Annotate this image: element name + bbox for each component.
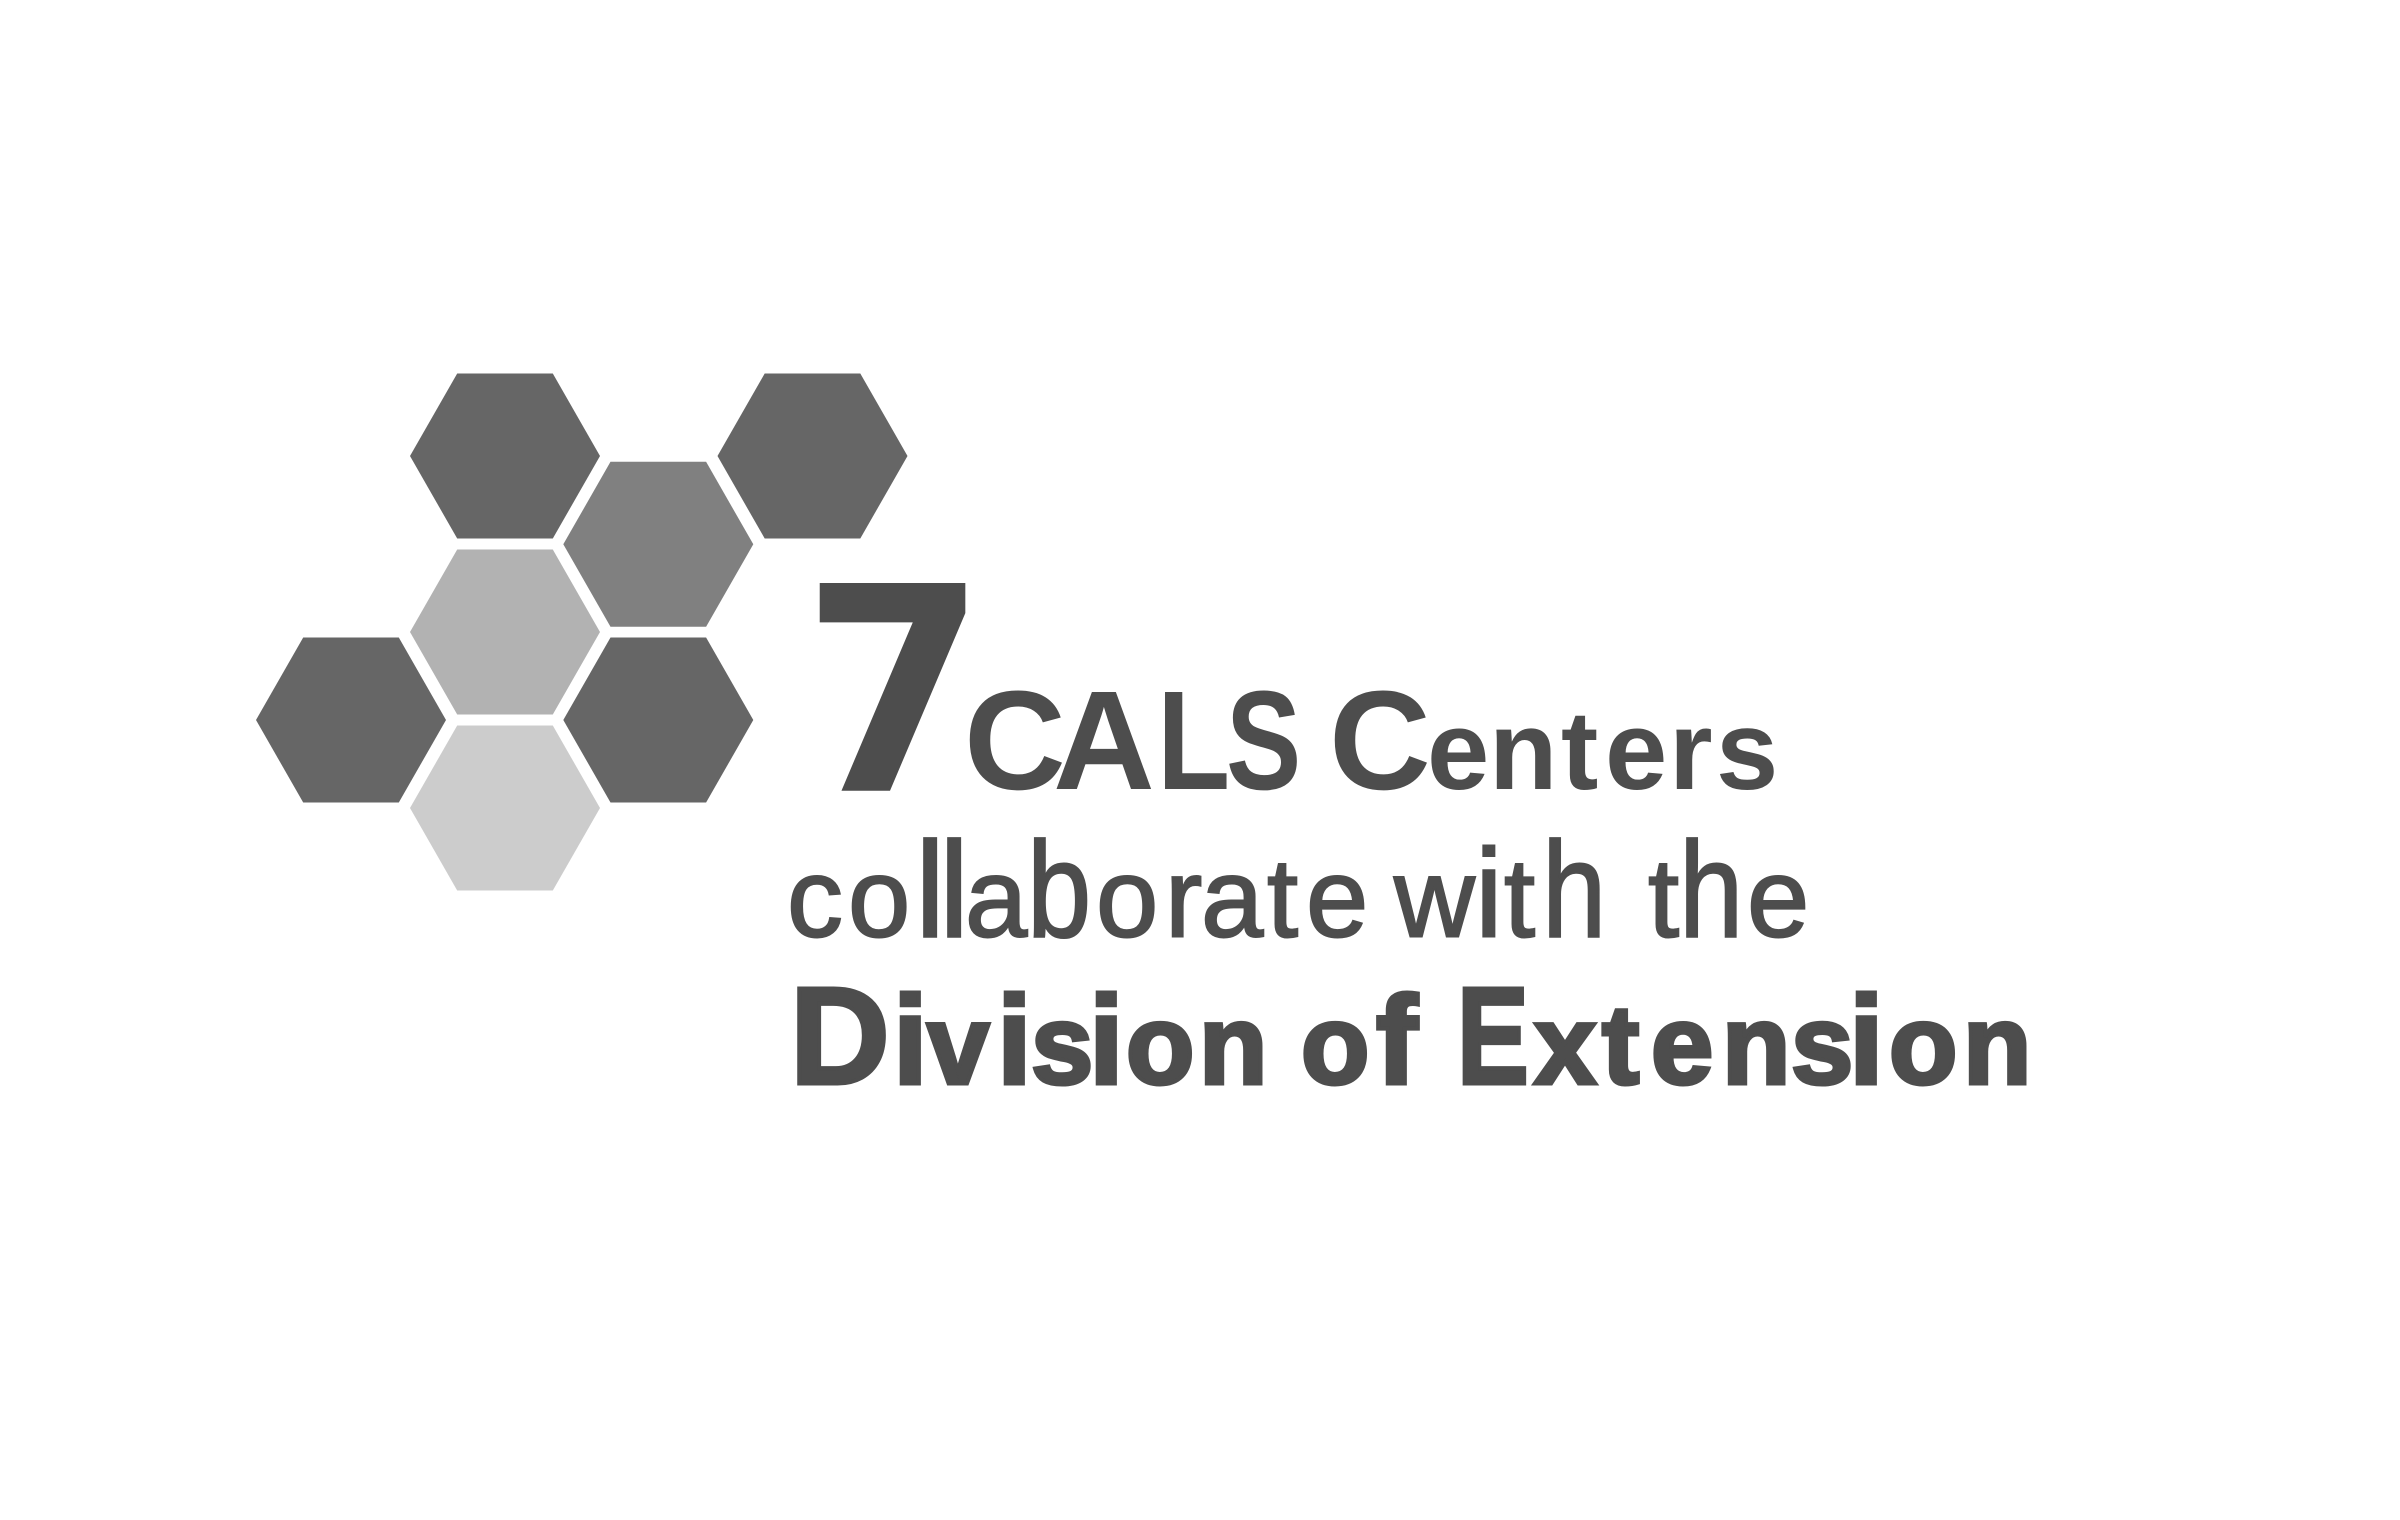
hexagon cluster icon bbox=[256, 374, 908, 890]
text line: collaborate with the: ll bbox=[915, 814, 969, 966]
heading line: CALS Centers: enters bbox=[1427, 688, 1778, 813]
text line: Division of Extension: v bbox=[927, 982, 989, 1108]
text line: Division of Extension: E bbox=[1457, 960, 1529, 1114]
text line: Division of Extension bbox=[790, 960, 2031, 1114]
text line: Division of Extension: i bbox=[893, 972, 928, 1110]
text line: collaborate with the: orate bbox=[1096, 836, 1368, 961]
text line: Division of Extension: o bbox=[1301, 982, 1369, 1108]
text line: collaborate with the: t bbox=[1648, 836, 1679, 961]
text line: Division of Extension: f bbox=[1376, 972, 1418, 1110]
text line: collaborate with the: a bbox=[965, 836, 1028, 961]
text line: collaborate with the: w bbox=[1393, 836, 1476, 961]
text line: collaborate with the: b bbox=[1027, 814, 1091, 966]
hexagon: upper middle bbox=[563, 462, 753, 627]
large number 7: 7 bbox=[802, 527, 986, 858]
text line: Division of Extension: D bbox=[790, 960, 890, 1114]
text line: Division of Extension: i bbox=[1849, 972, 1884, 1110]
text line: collaborate with the: e bbox=[1747, 836, 1809, 961]
hexagon: bottom lightest bbox=[410, 726, 600, 890]
heading line: CALS Centers: S bbox=[1226, 662, 1301, 820]
text line: collaborate with the bbox=[787, 814, 1809, 966]
text line: collaborate with the: h bbox=[1679, 814, 1743, 966]
heading line: CALS Centers bbox=[964, 661, 1778, 820]
hexagon: top right bbox=[718, 374, 908, 538]
text line: collaborate with the: t bbox=[1504, 836, 1535, 961]
text line: Division of Extension: on bbox=[1889, 982, 2031, 1108]
text line: Division of Extension: on bbox=[1126, 982, 1267, 1108]
text line: collaborate with the: i bbox=[1475, 825, 1503, 964]
text line: collaborate with the: co bbox=[787, 836, 910, 961]
heading line: CALS Centers: CA bbox=[964, 661, 1155, 819]
hexagon: top left bbox=[410, 374, 600, 538]
text line: Division of Extension: xtens bbox=[1534, 982, 1853, 1108]
hexagon: lower left bbox=[256, 638, 446, 802]
text line: collaborate with the: h bbox=[1542, 814, 1606, 966]
heading line: CALS Centers: C bbox=[1329, 661, 1431, 819]
text line: Division of Extension: s bbox=[1031, 982, 1093, 1108]
text line: Division of Extension: i bbox=[997, 972, 1032, 1110]
heading line: CALS Centers: L bbox=[1157, 662, 1230, 819]
hexagon: centre light bbox=[410, 550, 600, 714]
text line: Division of Extension: i bbox=[1089, 972, 1124, 1110]
hexagon: lower right bbox=[563, 638, 753, 802]
